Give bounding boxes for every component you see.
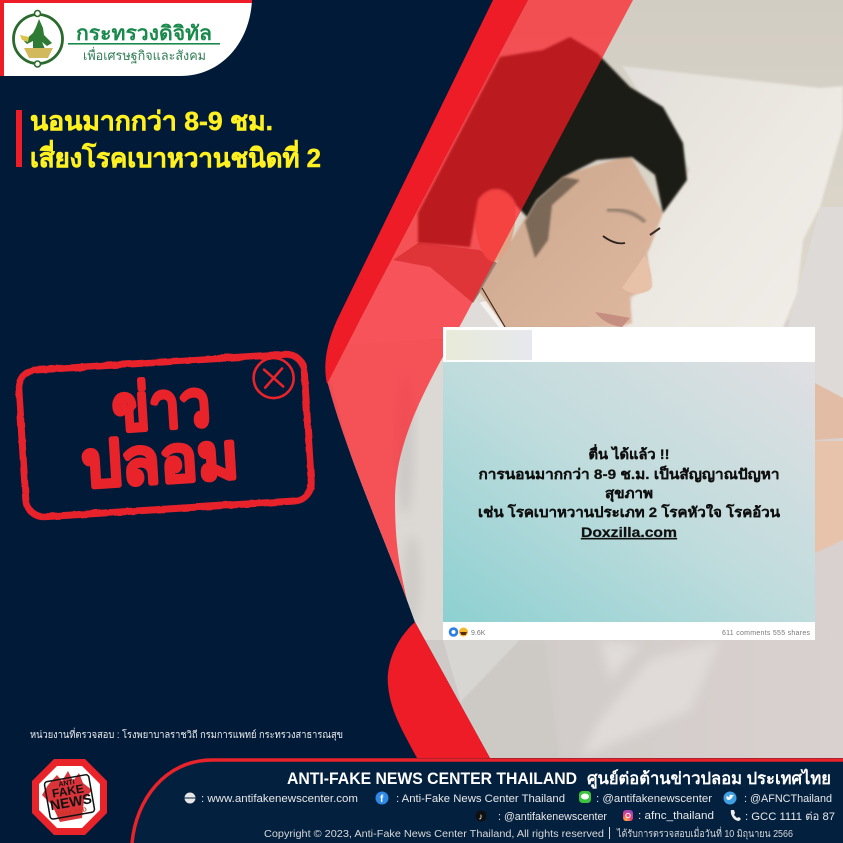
title: นอนมากกว่า 8-9 ชม. xyxy=(30,106,273,136)
post text: ตื่น ได้แล้ว !! xyxy=(588,444,670,462)
main pillow xyxy=(620,66,843,335)
reaction count: 9.6K xyxy=(471,630,486,637)
icon: anti-fake news stop sign xyxy=(32,759,107,835)
line: : @antifakenewscenter xyxy=(596,793,712,805)
lips xyxy=(595,312,630,327)
badge with text: FAKE xyxy=(51,781,85,801)
facebook: f xyxy=(380,794,384,805)
title: เสี่ยงโรคเบาหวานชนิดที่ 2 xyxy=(30,139,321,173)
side fade of hair xyxy=(525,177,580,258)
footer heading xyxy=(287,768,831,790)
footer heading: ศูนย์ต่อต้านข่าวปลอม ประเทศไทย xyxy=(587,768,831,790)
solid red band xyxy=(325,0,528,384)
translucent red band xyxy=(327,0,633,600)
post text: Doxzilla.com xyxy=(581,524,677,540)
footer heading: ANTI-FAKE NEWS CENTER THAILAND xyxy=(287,770,577,788)
stamp text: ข่าว xyxy=(110,367,212,445)
panel: facebook post xyxy=(443,327,815,640)
icon: ministry emblem xyxy=(14,10,62,67)
title xyxy=(16,106,321,173)
hand xyxy=(42,771,92,822)
copyright: Copyright © 2023, Anti-Fake News Center Thailand, All rights reserved xyxy=(264,829,604,840)
badge with text: THAILAND xyxy=(56,807,88,818)
sheet folds xyxy=(350,357,443,640)
post text: การนอนมากกว่า 8-9 ช.ม. เป็นสัญญาณปัญหา xyxy=(478,465,780,483)
ear xyxy=(475,189,515,262)
photo: man sleeping on pillow xyxy=(320,0,843,760)
icon: x in circle xyxy=(252,357,295,399)
instagram: : afnc_thailand xyxy=(638,810,714,822)
post text: สุขภาพ xyxy=(605,485,653,502)
ministry tagline: เพื่อเศรษฐกิจและสังคม xyxy=(83,47,206,64)
eye xyxy=(603,236,625,243)
hair xyxy=(418,37,687,247)
phone: : GCC 1111 ต่อ 87 xyxy=(745,811,835,823)
arm xyxy=(815,383,843,440)
necklace xyxy=(482,288,505,327)
second pillow xyxy=(788,207,843,398)
badge with text: NEWS xyxy=(49,790,93,813)
tiktok: ♪ xyxy=(478,812,483,822)
source note: หน่วยงานที่ตรวจสอบ : โรงพยาบาลราชวิถี กรมการแพทย์ กระทรวงสาธารณสุข xyxy=(30,727,343,741)
nose xyxy=(622,255,652,294)
stamp: fake news: ปลอม xyxy=(79,420,241,501)
post text xyxy=(478,444,780,540)
stamp: fake news xyxy=(18,353,312,518)
tiktok: : @antifakenewscenter xyxy=(498,811,607,823)
icon: reactions xyxy=(449,627,468,637)
post text: เช่น โรคเบาหวานประเภท 2 โรคหัวใจ โรคอ้วน xyxy=(478,503,780,520)
website: : www.antifakenewscenter.com xyxy=(201,793,358,805)
badge with text xyxy=(44,774,95,820)
verification date: ได้รับการตรวจสอบเมื่อวันที่ 10 มิถุนายน 2566 xyxy=(616,826,793,840)
eyebrow xyxy=(607,210,645,222)
ministry name: กระทรวงดิจิทัล xyxy=(76,23,212,45)
panel: ministry logo xyxy=(0,0,252,76)
twitter: : @AFNCThailand xyxy=(744,793,832,805)
solid red lower shape xyxy=(388,622,490,758)
neck xyxy=(393,243,497,303)
shoulder and shirt xyxy=(480,301,504,327)
facebook: : Anti-Fake News Center Thailand xyxy=(396,793,565,805)
badge with text: ANTI xyxy=(58,779,75,789)
footer panel xyxy=(132,760,843,843)
comments and shares: 611 comments 555 shares xyxy=(722,630,810,637)
face xyxy=(480,155,663,327)
blurred account name xyxy=(446,330,532,360)
